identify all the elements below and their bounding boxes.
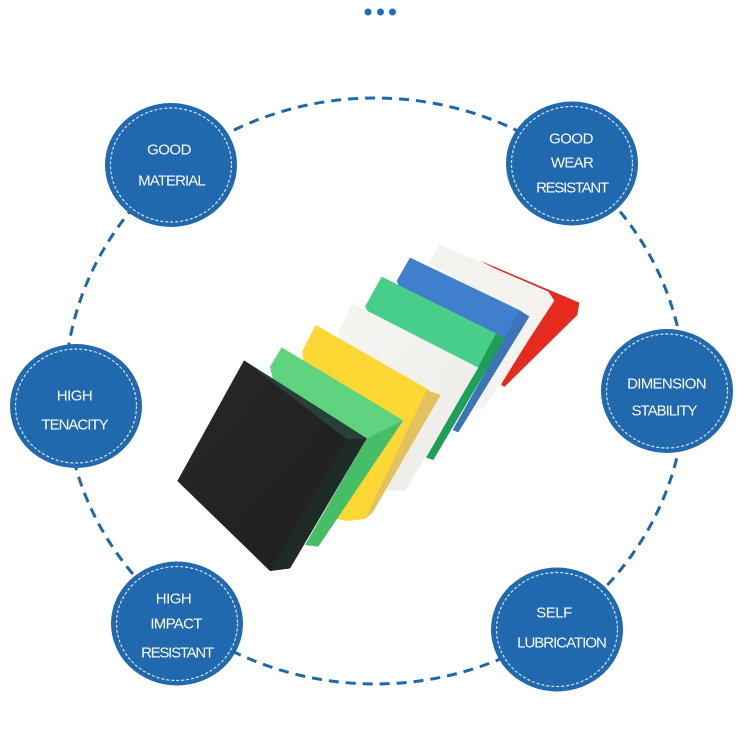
badge: dimension stability: DIMENSION bbox=[627, 376, 706, 392]
black sheet bbox=[177, 360, 367, 571]
yellow sheet bbox=[302, 325, 441, 521]
badge: good wear resistant: WEAR bbox=[551, 154, 594, 172]
blue sheet bbox=[397, 258, 529, 432]
middle white sheet bbox=[338, 303, 478, 491]
badge: good material bbox=[105, 103, 237, 227]
product photo: stacked colored sheets bbox=[177, 244, 579, 571]
red sheet bbox=[479, 260, 579, 387]
badge: good material: MATERIAL bbox=[138, 172, 205, 190]
badge: dimension stability bbox=[601, 329, 733, 453]
badge: high tenacity: TENACITY bbox=[41, 416, 109, 434]
three dots bbox=[364, 8, 396, 16]
badge: high impact resistant: RESISTANT bbox=[141, 644, 214, 662]
badge: high tenacity bbox=[10, 344, 142, 468]
badge: good wear resistant: RESISTANT bbox=[536, 180, 609, 196]
badge: high impact resistant: IMPACT bbox=[150, 616, 202, 632]
badge: good wear resistant: GOOD bbox=[549, 130, 594, 148]
badge: self lubrication: LUBRICATION bbox=[517, 634, 606, 652]
back green sheet bbox=[365, 277, 505, 460]
badge: high impact resistant: HIGH bbox=[156, 590, 191, 608]
front green sheet bbox=[270, 347, 403, 547]
badge: high impact resistant bbox=[111, 562, 243, 686]
back white sheet bbox=[428, 244, 554, 409]
badge: self lubrication bbox=[491, 568, 623, 692]
badge: high tenacity: HIGH bbox=[57, 388, 92, 404]
dashed ring bbox=[65, 98, 685, 684]
badge: dimension stability: STABILITY bbox=[632, 402, 697, 420]
badge: self lubrication: SELF bbox=[536, 604, 572, 622]
badge: good wear resistant bbox=[506, 102, 638, 226]
badge: good material: GOOD bbox=[147, 142, 192, 158]
